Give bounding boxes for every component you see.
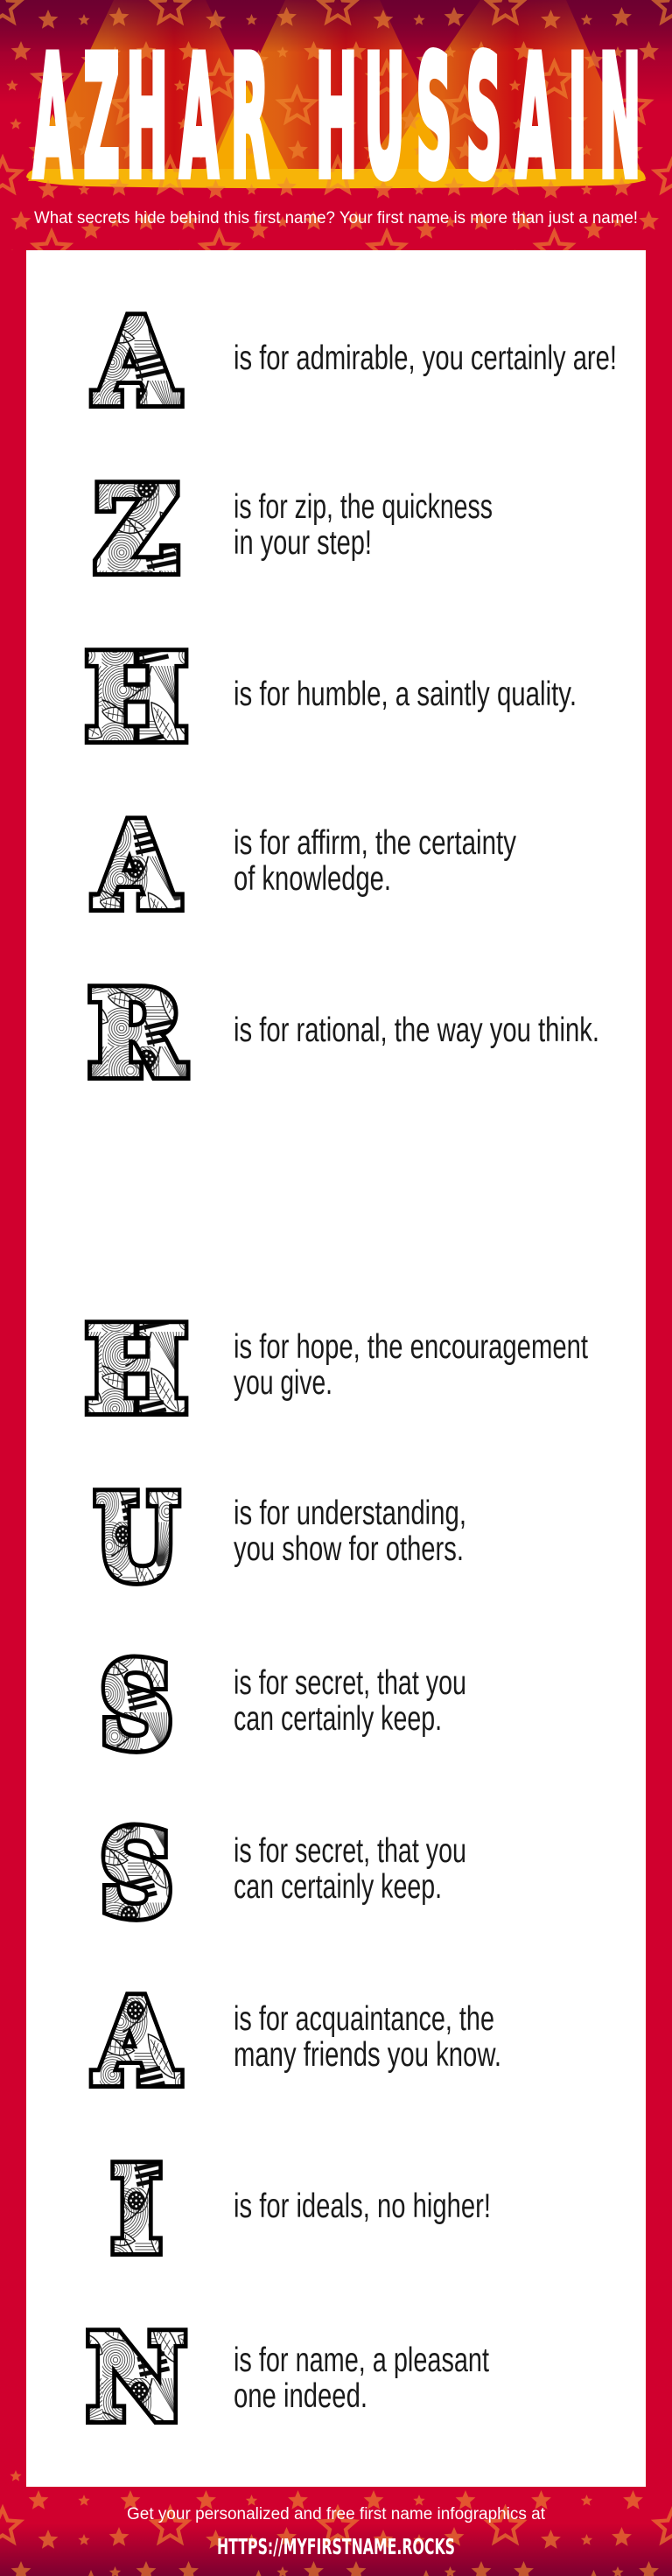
description: many friends you know. [234,2036,501,2074]
side star [10,2470,22,2482]
subtitle: What secrets hide behind this first name? Your first name is more than just a name! [34,209,638,228]
description: is for name, a pleasant [234,2342,489,2379]
row: N name [88,2311,489,2445]
description: you give. [234,1364,332,1402]
description: can certainly keep. [234,1868,442,1906]
row: A admirable [95,296,617,429]
letter S: S [101,1807,172,1941]
letter Z: Z [95,463,178,597]
description: is for ideals, no higher! [234,2188,491,2225]
letter A: A [95,1976,178,2109]
description: of knowledge. [234,860,391,898]
letter Z: Z [95,463,178,597]
row: S secret [101,1639,466,1773]
description [234,1832,466,1906]
letter S: S [101,1807,172,1941]
description [234,2000,501,2074]
description [234,2342,489,2415]
description: one indeed. [234,2377,368,2415]
description [234,1664,466,1738]
description: is for affirm, the certainty [234,824,516,862]
star pattern: top [0,0,672,250]
letter U: U [95,1472,178,1606]
letter N: N [88,2311,186,2445]
description: is for acquaintance, the [234,2000,494,2038]
letter H: H [87,631,186,765]
description: in your step! [234,524,372,562]
letter A: A [95,800,178,933]
row: S secret [101,1807,466,1941]
star pattern: bottom [0,2487,672,2576]
row: R rational [89,967,599,1101]
spotlights [0,0,672,188]
letter R: R [89,967,184,1101]
letter H: H [87,1303,186,1437]
description: can certainly keep. [234,1700,442,1738]
letter S: S [101,1639,172,1773]
description [234,1328,588,1402]
top gradient [0,0,672,105]
letter A: A [95,296,178,429]
description [234,488,493,562]
description: is for understanding, [234,1494,466,1532]
letter A: A [95,296,178,429]
letter H: H [87,1303,186,1437]
letter A: A [95,800,178,933]
description: is for zip, the quickness [234,488,493,526]
description: is for secret, that you [234,1664,466,1702]
letter N: N [88,2311,186,2445]
footer text: Get your personalized and free first name infographics at [127,2505,546,2524]
title: AZHAR HUSSAIN [33,22,640,215]
row: A affirm [95,800,516,933]
row: A acquaintance [95,1976,501,2109]
letter U: U [95,1472,178,1606]
description: is for secret, that you [234,1832,466,1870]
letter A: A [95,1976,178,2109]
description [234,824,516,898]
row: H hope [87,1303,588,1437]
row: U understanding [95,1472,466,1606]
description [234,1494,466,1568]
row: H humble [87,631,577,765]
letter S: S [101,1639,172,1773]
row: I ideals [112,2144,491,2277]
row: Z zip [95,463,493,597]
letter H: H [87,631,186,765]
letter I: I [112,2144,161,2277]
footer gradient [0,2524,672,2576]
footer url: HTTPS://MYFIRSTNAME.ROCKS [217,2534,455,2559]
letter R: R [89,967,184,1101]
description: you show for others. [234,1530,464,1568]
letter I: I [112,2144,161,2277]
